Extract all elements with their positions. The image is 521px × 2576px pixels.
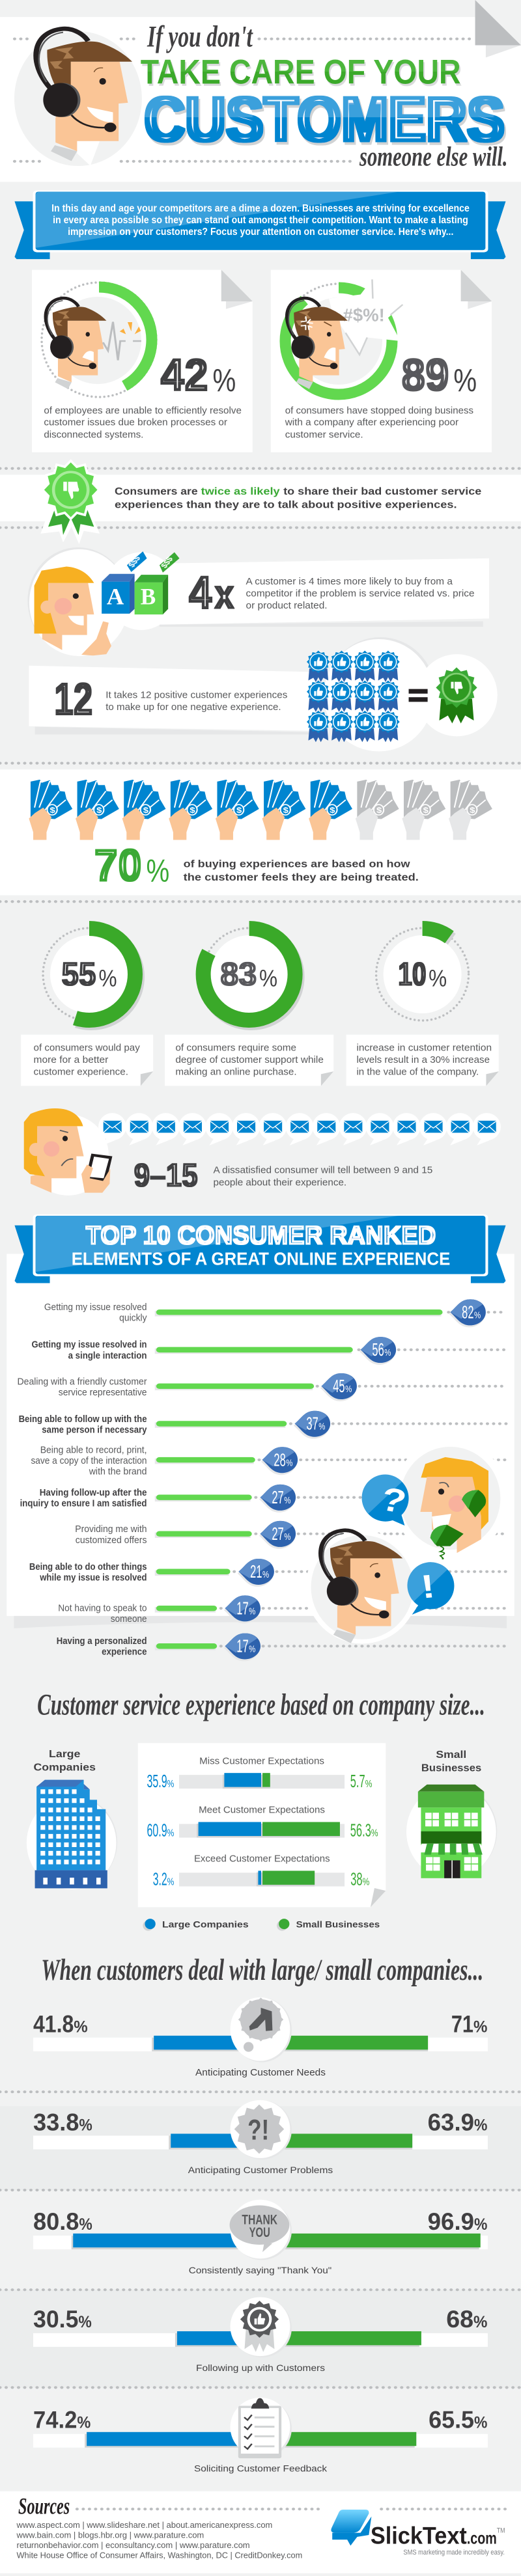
row: 27% offers: 27 xyxy=(272,1524,284,1544)
logo: SlickText.com: SlickText xyxy=(371,2521,467,2549)
row: 17% speak: % xyxy=(249,1606,255,1617)
row: following up with customers xyxy=(0,2297,521,2387)
panel: sources: returnonbehavior.com | econsultancy.com | www.parature.com xyxy=(17,2541,250,2551)
icon: A and B blocks: $$$ xyxy=(159,555,175,569)
row: 28%: 28 xyxy=(274,1449,286,1470)
row: 21%: % xyxy=(262,1569,269,1580)
icon: A and B blocks xyxy=(102,551,180,614)
stat and note: degree of customer support while xyxy=(175,1055,324,1065)
logo: SlickText.com xyxy=(331,2510,505,2556)
icon: thank you bubble: YOU xyxy=(249,2225,270,2240)
row: exceed expectations: 38 xyxy=(350,1869,363,1889)
row: 45% xyxy=(18,1373,507,1401)
row: 27% offers xyxy=(75,1521,507,1549)
banner: intro xyxy=(14,191,506,259)
title: If you don't xyxy=(147,20,253,53)
row: anticipating customer problems: 33.8 xyxy=(33,2108,79,2136)
row: consistently saying thank you: % xyxy=(474,2215,488,2233)
row: meet expectations: Meet Customer Expectations xyxy=(199,1805,325,1815)
row: 17% personalized: experience xyxy=(102,1647,147,1657)
speech burst xyxy=(329,279,402,355)
stat and note: of consumers require some xyxy=(175,1043,296,1053)
icon: seven of ten money fans xyxy=(29,780,492,840)
stat and note: of consumers would pay xyxy=(34,1043,140,1053)
icon: thumbs-down award xyxy=(40,459,101,544)
row: 56%: a single interaction xyxy=(68,1351,147,1361)
row: anticipating customer problems: % xyxy=(79,2116,92,2134)
row: anticipating customer problems: % xyxy=(474,2116,488,2134)
row: miss expectations: % xyxy=(365,1778,373,1790)
stat and note: 83 xyxy=(220,955,257,993)
card xyxy=(271,270,492,452)
row: exceed expectations xyxy=(153,1854,369,1889)
row: following up with customers: % xyxy=(473,2313,488,2331)
ring chart 89% xyxy=(281,284,396,398)
stat 4x: x xyxy=(214,570,234,618)
row: consistently saying thank you xyxy=(0,2190,521,2290)
stat and note: 10 xyxy=(398,955,427,993)
icon: thank you bubble: THANK xyxy=(242,2212,277,2227)
row: exceed expectations: % xyxy=(363,1876,369,1887)
text: to share their bad customer service xyxy=(283,486,482,497)
row: miss expectations: % xyxy=(167,1778,174,1790)
text xyxy=(115,486,482,510)
text: to make up for one negative experience. xyxy=(106,702,281,713)
stat 89%: 89 xyxy=(401,350,449,400)
folded corner xyxy=(475,0,521,57)
panel: sources: www.bain.com | blogs.hbr.org | www.parature.com xyxy=(16,2531,204,2540)
row: 27% follow-up: inquiry to ensure I am satisfied xyxy=(20,1499,147,1509)
panel: 12 positive experiences xyxy=(29,637,498,752)
icon: exclamation bubble: ! xyxy=(419,1567,437,1605)
stat and note: increase in customer retention xyxy=(356,1043,492,1053)
section backgrounds xyxy=(0,2106,521,2573)
row: soliciting customer feedback xyxy=(33,2398,488,2474)
row: 27% offers: customized offers xyxy=(76,1535,147,1546)
icon: A and B blocks: B xyxy=(141,584,156,610)
row: soliciting customer feedback: % xyxy=(474,2413,488,2432)
stat 42%: 42 xyxy=(160,350,208,400)
row: 45%: % xyxy=(345,1384,352,1395)
row: 82%: % xyxy=(474,1309,481,1321)
stat 4x xyxy=(189,566,234,618)
icon: equals xyxy=(409,689,428,702)
row: anticipating customer needs: Anticipating Customer Needs xyxy=(195,2068,326,2077)
text: of employees are unable to efficiently resolve xyxy=(44,406,242,416)
row: 27% offers: % xyxy=(284,1531,290,1542)
row: meet expectations xyxy=(147,1805,378,1841)
icon: burst with ?! xyxy=(231,2100,292,2159)
stat 70% and text: % xyxy=(146,853,169,888)
row: meet expectations: 56.3 xyxy=(350,1820,371,1841)
icon: stressed agent xyxy=(46,298,141,389)
legend: Large Companies xyxy=(162,1920,249,1930)
icon: small business shop: Small xyxy=(436,1749,466,1761)
banner: top 10 heading: TOP 10 CONSUMER RANKED xyxy=(86,1221,436,1250)
text: people about their experience. xyxy=(214,1178,346,1188)
icon: question bubble xyxy=(362,1474,410,1526)
text: experiences than they are to talk about positive experiences. xyxy=(115,499,457,510)
stat 42%: % xyxy=(213,362,236,398)
icon: thought bubble with shoe xyxy=(231,1997,292,2062)
text xyxy=(285,406,473,440)
row: anticipating customer problems xyxy=(33,2100,488,2159)
icon: twelve thumbs-up awards xyxy=(307,651,400,742)
text: It takes 12 positive customer experiences xyxy=(106,691,287,700)
stat 9-15: 9–15 xyxy=(134,1157,198,1194)
text xyxy=(106,691,287,713)
icon: clipboard checklist xyxy=(231,2398,292,2458)
text: competitor if the problem is service related vs. price xyxy=(246,589,475,599)
icon: A and B blocks: $$$ xyxy=(126,555,143,569)
label: anticipating customer problems: Anticipating Customer Problems xyxy=(188,2165,333,2176)
panel: sources: Sources xyxy=(18,2493,70,2519)
icon: thumbs-up award xyxy=(231,2297,292,2357)
icon: large company building: Large xyxy=(49,1747,81,1759)
banner shape xyxy=(29,637,498,752)
panel: sources: White House Office of Consumer Affairs, Washington, DC | CreditDonkey.com xyxy=(17,2551,302,2560)
stat 12: 12 xyxy=(54,674,92,724)
text: with a company after experiencing poor xyxy=(285,418,459,428)
panel: 55% xyxy=(21,928,153,1086)
row: 37%: Being able to follow up with the xyxy=(19,1414,147,1425)
row: 82%: quickly xyxy=(119,1313,147,1323)
row: 37%: 37 xyxy=(306,1414,318,1434)
row: 17% speak xyxy=(58,1595,507,1624)
row: anticipating customer needs: 41.8 xyxy=(33,2010,74,2038)
icon: thank you bubble xyxy=(230,2200,292,2260)
text: Consumers are xyxy=(115,486,198,497)
row: 17% speak: someone xyxy=(111,1615,147,1624)
stat and note: 55 xyxy=(61,955,96,993)
stat and note xyxy=(21,955,153,1086)
row: 45%: Dealing with a friendly customer xyxy=(18,1377,147,1387)
icon: large company building: Companies xyxy=(34,1761,96,1773)
row: miss expectations: 5.7 xyxy=(350,1771,365,1791)
stat and note: % xyxy=(99,966,117,992)
row: 82%: 82 xyxy=(462,1302,474,1322)
stat and note: % xyxy=(429,966,447,992)
row: 28%: with the brand xyxy=(89,1467,147,1477)
row: following up with customers: Following up with Customers xyxy=(196,2363,325,2373)
row: 17% speak: Not having to speak to xyxy=(58,1604,147,1613)
panel: twice as likely xyxy=(0,459,521,544)
icon: fifteen email bubbles xyxy=(98,1113,501,1145)
card xyxy=(32,270,253,452)
text: or product related. xyxy=(246,601,328,610)
icon: smiling customer xyxy=(35,566,111,655)
chart: top 10 ranked elements xyxy=(18,1299,507,1661)
text: disconnected systems. xyxy=(44,430,143,440)
logo: SlickText.com: TM xyxy=(497,2527,505,2534)
stat and note: in the value of the company. xyxy=(356,1067,479,1077)
stat and note xyxy=(346,955,499,1086)
text: customer issues due broken processes or xyxy=(44,418,228,428)
row: 56%: Getting my issue resolved in xyxy=(31,1340,147,1350)
row: soliciting customer feedback: % xyxy=(77,2413,91,2432)
text xyxy=(44,406,242,440)
text: A customer is 4 times more likely to buy from a xyxy=(246,577,453,587)
stat and note: levels result in a 30% increase xyxy=(356,1055,490,1065)
panel: 70% buying experiences xyxy=(0,763,521,901)
row: following up with customers: % xyxy=(78,2313,92,2331)
icon: thumbs-down award xyxy=(436,667,477,724)
stat 4x: 4 xyxy=(189,566,212,618)
ring chart 10% xyxy=(376,928,470,1023)
panel: sources xyxy=(16,2493,507,2560)
icon: question bubble: ? xyxy=(377,1480,410,1520)
row: exceed expectations: % xyxy=(167,1876,174,1887)
legend xyxy=(143,1919,380,1931)
row: meet expectations: % xyxy=(371,1827,378,1839)
row: 56% xyxy=(31,1337,507,1365)
ring chart 83% xyxy=(203,928,297,1023)
panel: 89% stat xyxy=(271,270,492,452)
panel: company size comparison xyxy=(27,1743,497,1931)
icon: customer on telephone xyxy=(396,1444,504,1559)
title xyxy=(141,20,508,172)
panel: top 10 white background xyxy=(7,1254,514,1628)
icon: A and B blocks: A xyxy=(107,584,124,610)
text: customer service. xyxy=(285,430,363,440)
text xyxy=(246,577,475,610)
icon: large company building xyxy=(27,1747,117,1889)
panel: sources: www.aspect.com | www.slideshare.net | about.americanexpress.com xyxy=(16,2521,272,2530)
row: 27% follow-up: Having follow-up after the xyxy=(40,1488,147,1498)
row: consistently saying thank you: % xyxy=(79,2215,92,2233)
row: anticipating customer problems: 63.9 xyxy=(428,2108,474,2136)
row: 56%: 56 xyxy=(372,1339,384,1360)
row: 82% xyxy=(44,1299,507,1327)
panel: 83% xyxy=(165,928,333,1086)
icon: unhappy customer with phone xyxy=(24,1108,112,1196)
row: 37%: % xyxy=(318,1421,326,1432)
text: A dissatisfied consumer will tell between 9 and 15 xyxy=(214,1166,432,1175)
row: exceed expectations: Exceed Customer Expectations xyxy=(194,1854,330,1864)
text: of consumers have stopped doing business xyxy=(285,406,473,416)
row: miss expectations: Miss Customer Expectations xyxy=(199,1757,324,1766)
row: 17% speak: 17 xyxy=(236,1598,249,1619)
row: meet expectations: % xyxy=(167,1827,174,1839)
row: anticipating customer needs: 71 xyxy=(451,2010,473,2038)
row: 37% xyxy=(19,1411,507,1439)
row: 17% personalized: % xyxy=(249,1643,255,1654)
row: 28%: % xyxy=(286,1457,293,1468)
row: anticipating customer needs: % xyxy=(473,2018,488,2036)
text: twice as likely xyxy=(201,486,280,497)
row: 56%: % xyxy=(384,1347,391,1358)
icon: small business shop: Businesses xyxy=(421,1762,481,1774)
ring chart 42% xyxy=(42,282,156,397)
icon: headset agent xyxy=(14,29,142,166)
banner shape xyxy=(27,547,489,656)
row: 37%: same person if necessary xyxy=(42,1425,147,1435)
stat and note: % xyxy=(259,966,277,992)
card: expectations chart xyxy=(138,1743,386,1907)
row: 28%: save a copy of the interaction xyxy=(31,1456,147,1466)
banner: top 10 heading xyxy=(14,1214,506,1283)
row: 21%: Being able to do other things xyxy=(29,1562,147,1572)
row: soliciting customer feedback: 74.2 xyxy=(33,2405,77,2433)
row: 27% follow-up: % xyxy=(284,1494,290,1506)
row: soliciting customer feedback: 65.5 xyxy=(429,2405,474,2433)
stat and note: making an online purchase. xyxy=(175,1067,297,1077)
stat and note xyxy=(165,955,333,1086)
icon: burst with ?!: ?! xyxy=(247,2115,269,2146)
legend: Small Businesses xyxy=(296,1920,380,1930)
icon: small business shop xyxy=(406,1749,497,1878)
row: miss expectations: 35.9 xyxy=(147,1771,167,1791)
row: 45%: 45 xyxy=(333,1376,345,1396)
row: 17% personalized: Having a personalized xyxy=(57,1636,147,1646)
row: miss expectations xyxy=(147,1757,373,1791)
stat 89%: % xyxy=(453,362,477,398)
stat 70% and text: the customer feels they are being treated. xyxy=(184,871,419,883)
row: 21%: while my issue is resolved xyxy=(39,1573,147,1583)
stat and note: customer experience. xyxy=(34,1067,128,1077)
panel: 4x xyxy=(27,547,489,656)
row: 17% personalized: 17 xyxy=(236,1636,249,1656)
logo: SlickText.com: .com xyxy=(467,2529,497,2548)
stat and note: more for a better xyxy=(34,1055,109,1065)
row: 21%: 21 xyxy=(250,1561,262,1582)
stat 70% and text: 70 xyxy=(94,841,142,891)
row: 82%: Getting my issue resolved xyxy=(44,1302,147,1312)
icon: headset agent xyxy=(308,1530,416,1643)
panel: 42% stat xyxy=(32,270,253,452)
row: 27% follow-up xyxy=(20,1485,507,1513)
row: anticipating customer needs: % xyxy=(74,2018,88,2036)
row: meet expectations: 60.9 xyxy=(147,1820,167,1841)
row: 28% xyxy=(31,1446,507,1477)
speech burst: #$%! xyxy=(343,305,385,325)
row: following up with customers: 30.5 xyxy=(33,2305,78,2333)
row: consistently saying thank you: 96.9 xyxy=(428,2208,474,2235)
stat 70% and text xyxy=(0,841,521,901)
ring chart 55% xyxy=(43,928,137,1023)
text xyxy=(214,1166,432,1188)
row: 28%: Being able to record, print, xyxy=(40,1446,147,1455)
stat 70% and text: of buying experiences are based on how xyxy=(184,858,410,870)
panel: 9-15 people xyxy=(24,1108,501,1196)
row: consistently saying thank you: 80.8 xyxy=(33,2208,79,2235)
row: 17% personalized xyxy=(57,1633,507,1661)
row: exceed expectations: 3.2 xyxy=(153,1869,167,1889)
row: following up with customers: 68 xyxy=(446,2305,473,2333)
panel: header xyxy=(0,0,521,182)
row: consistently saying thank you: Consistently saying "Thank You" xyxy=(189,2266,331,2276)
row: anticipating customer needs xyxy=(0,1997,521,2092)
panel: 10% xyxy=(346,928,499,1086)
icon: angry agent xyxy=(287,298,348,389)
row: 45%: service representative xyxy=(59,1388,147,1398)
row: soliciting customer feedback: Soliciting Customer Feedback xyxy=(194,2464,327,2474)
icon: exclamation bubble xyxy=(407,1562,454,1615)
row: 27% offers: Providing me with xyxy=(75,1524,147,1535)
row: 21% xyxy=(29,1559,507,1587)
row: 27% follow-up: 27 xyxy=(272,1487,284,1507)
